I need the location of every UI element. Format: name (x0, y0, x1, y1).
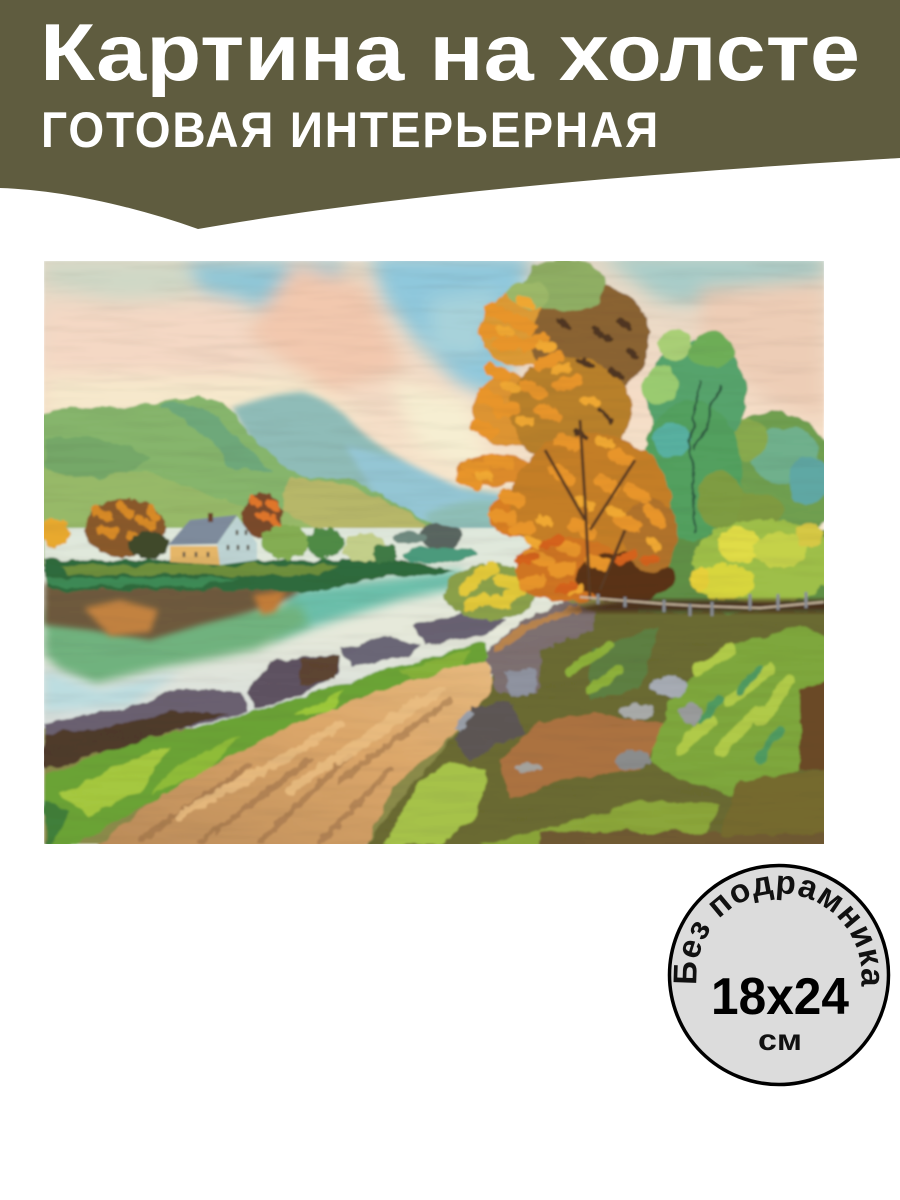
sky (44, 261, 824, 532)
roof (168, 515, 237, 545)
far blue mountains (230, 388, 500, 530)
far shore and island (44, 524, 478, 592)
house (168, 513, 257, 565)
header banner (0, 0, 900, 229)
dirt road (96, 660, 495, 850)
subtitle: ГОТОВАЯ ИНТЕРЬЕРНАЯ (41, 102, 660, 158)
green reflection (44, 605, 310, 684)
walls (170, 546, 220, 565)
shore rocks (44, 613, 507, 770)
title: Картина на холсте (40, 8, 860, 98)
teal shallows (270, 570, 470, 640)
foliage dabs (462, 300, 660, 590)
trunks (545, 420, 635, 600)
shoreline trees (40, 493, 397, 562)
green tree (640, 329, 830, 612)
orange autumn tree (457, 259, 678, 602)
size value: 18х24 (711, 968, 849, 1026)
unit: см (758, 1024, 802, 1057)
foliage masses (457, 259, 678, 602)
grass verge (44, 640, 490, 850)
chimney (208, 513, 213, 522)
bright yellow bushes (690, 520, 837, 604)
teal tree (732, 409, 824, 528)
lake (44, 528, 564, 728)
right hillside (364, 605, 830, 850)
fence (560, 592, 830, 616)
green mountain (30, 396, 440, 565)
canvas brush texture (50, 264, 799, 795)
painting: landscape on canvas (30, 255, 837, 850)
curved label: Без подрамника (674, 876, 880, 987)
yellow bush by lake (444, 564, 536, 620)
boulders and stones (455, 600, 702, 773)
size badge (668, 864, 890, 1086)
brown reflection (44, 583, 310, 640)
